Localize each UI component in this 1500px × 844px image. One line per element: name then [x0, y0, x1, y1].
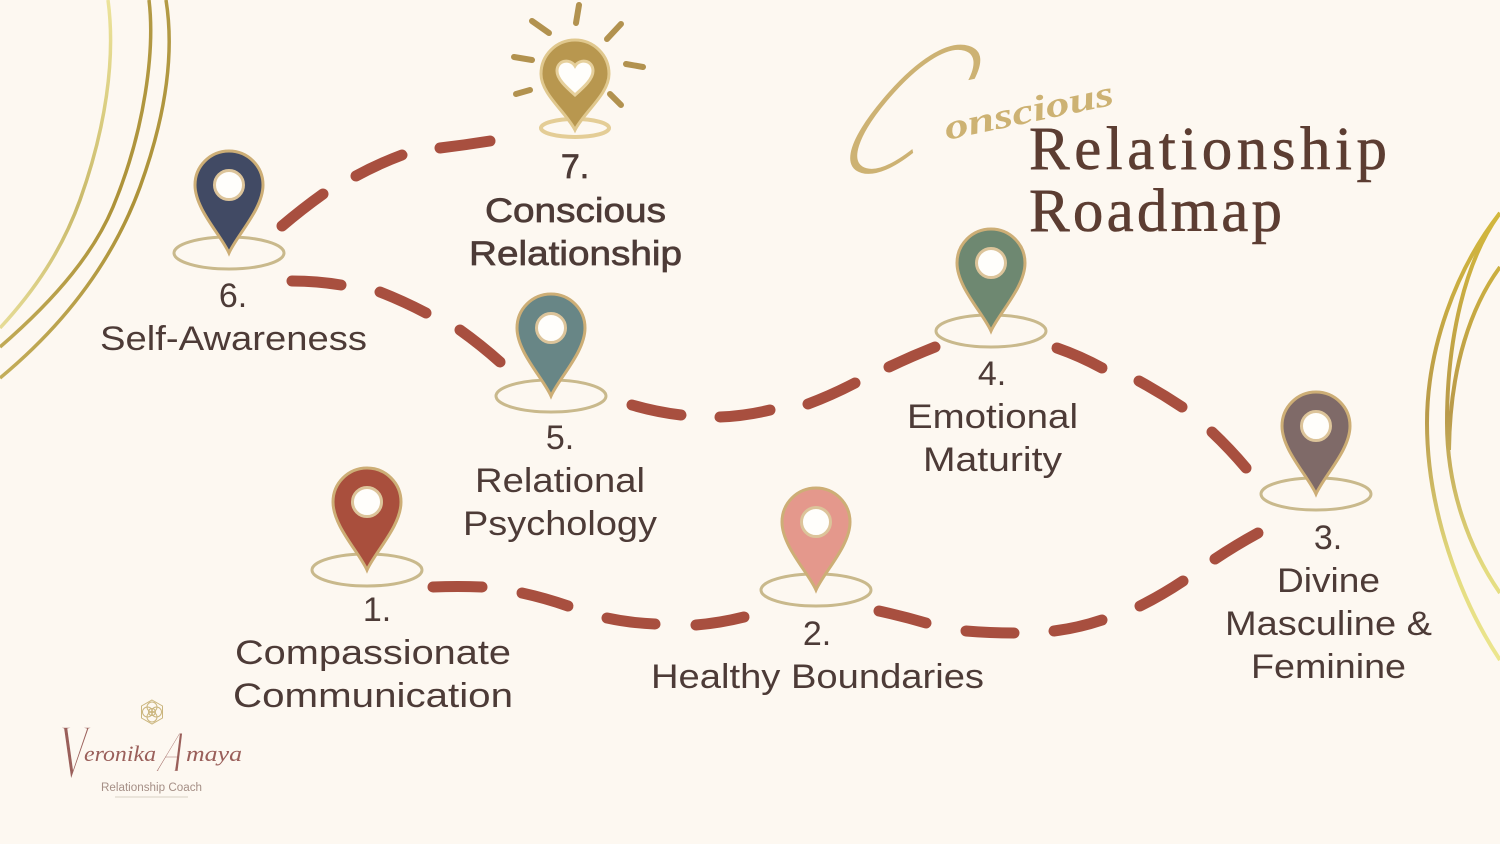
logo	[58, 700, 242, 797]
step 7 label: 7.	[561, 148, 589, 186]
step 2 label: Healthy Boundaries	[651, 658, 984, 696]
script word: Conscious: onscious	[940, 73, 1117, 148]
logo: eronika	[84, 741, 156, 766]
logo: maya	[186, 741, 242, 766]
step 6 label: 6.	[219, 277, 247, 315]
step 2 label: 2.	[803, 615, 831, 653]
decorative gold arcs, right edge	[1427, 213, 1500, 660]
step 5 label	[463, 419, 657, 543]
step 6 pin	[174, 151, 284, 269]
step 2 label	[651, 615, 984, 696]
step 7 label: Relationship	[469, 235, 682, 273]
step 4 label	[907, 355, 1078, 479]
step 5 pin	[496, 294, 606, 412]
step 4 pin	[936, 229, 1046, 347]
step 1 label	[233, 591, 513, 715]
title	[1029, 116, 1387, 245]
title: Relationship	[1029, 116, 1387, 183]
step 7 light bulb pin with heart	[514, 5, 643, 137]
decorative gold arcs, top left	[0, 0, 169, 378]
step 1 label: 1.	[363, 591, 391, 629]
step 7 label: Conscious	[485, 192, 666, 230]
step 5 label: 5.	[546, 419, 574, 457]
title: Roadmap	[1029, 178, 1282, 245]
step 4 label: Maturity	[923, 441, 1062, 479]
step 3 label	[1225, 519, 1432, 686]
step 6 label	[100, 277, 367, 358]
step 6 label: Self-Awareness	[100, 320, 367, 358]
step 3 label: 3.	[1314, 519, 1342, 557]
step 3 pin	[1261, 392, 1371, 510]
step 3 label: Feminine	[1251, 648, 1406, 686]
step 3 label: Divine	[1277, 562, 1380, 600]
logo: A	[150, 720, 193, 786]
dashed roadmap path	[282, 141, 1258, 633]
logo: Relationship Coach	[101, 782, 202, 794]
step 1 pin	[312, 468, 422, 586]
step 3 label: Masculine &	[1225, 605, 1432, 643]
step 1 label: Communication	[233, 677, 513, 715]
step 2 pin	[761, 488, 871, 606]
step 4 label: 4.	[978, 355, 1006, 393]
step 5 label: Relational	[475, 462, 645, 500]
step 1 label: Compassionate	[235, 634, 511, 672]
step 7 label	[469, 148, 682, 273]
logo: V	[58, 709, 92, 796]
step 4 label: Emotional	[907, 398, 1078, 436]
step 5 label: Psychology	[463, 505, 657, 543]
